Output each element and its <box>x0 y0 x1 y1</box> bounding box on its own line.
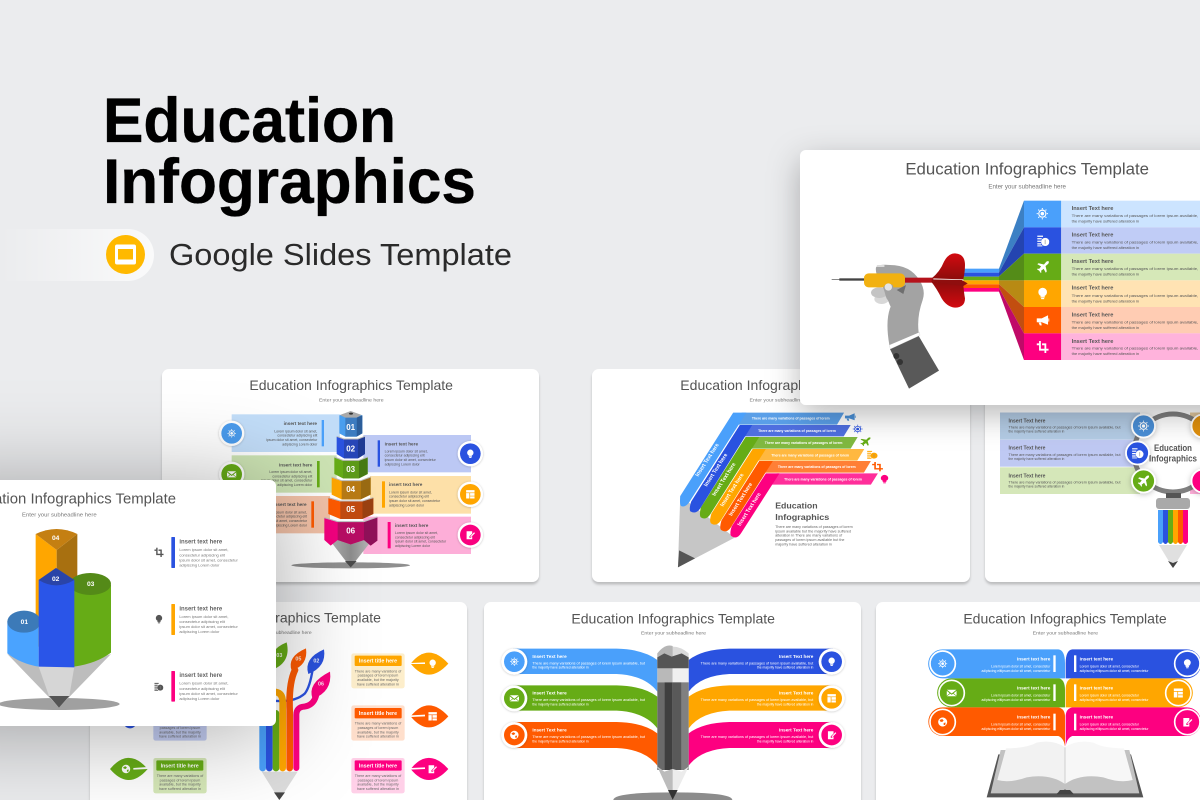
pencil tip <box>678 550 695 567</box>
item: blue (hidden under front slide): have suffered alteration in <box>159 735 201 739</box>
left ribbon text <box>982 655 1056 731</box>
pencil colored bands <box>680 413 779 537</box>
side paragraph: ipsum available but the majority have suffered <box>775 530 851 533</box>
pencil segment 04 <box>332 477 371 499</box>
right ribbon text: Lorem ipsum dolor sit amet, consectetur <box>1080 723 1140 727</box>
pencil handle <box>1156 493 1190 568</box>
left ribbon text: adipiscing elitipsum dolor sit amet, consectetur <box>982 727 1051 731</box>
right ribbon text: insert text here <box>1080 714 1113 719</box>
pencil shadow <box>613 792 732 800</box>
central pencil <box>657 645 689 800</box>
item: red-orange leaf: There are many variations of <box>355 722 402 726</box>
left bar text: consectetur adipiscing elit <box>277 434 317 438</box>
list item: crop: Lorem ipsum dolor sit amet, <box>179 547 229 552</box>
right bar text: ipsum dolor sit amet, consectetur <box>385 458 437 462</box>
ribbon text right: Insert Text here <box>779 654 814 659</box>
right bar text: adipiscing Lorem dolor <box>385 462 421 466</box>
ribbon text left: Insert Text here <box>532 727 567 732</box>
horizontal ribbons <box>734 413 878 485</box>
left ribbon text: insert text here <box>1017 714 1051 719</box>
text column: the majority have suffered alteration in <box>1072 298 1139 303</box>
list item: coins: adipiscing Lorem dolor <box>179 696 220 701</box>
list item: bulb: Lorem ipsum dolor sit amet, <box>179 614 229 619</box>
column 01: 01 <box>21 619 28 626</box>
item: green leaf: available, but the majority <box>159 783 201 787</box>
left ribbon text: adipiscing elitipsum dolor sit amet, consectetur <box>982 669 1051 673</box>
pencil segment 05: 05 <box>346 505 356 514</box>
ribbon end icons <box>845 413 888 483</box>
pencil segment 06 <box>324 517 377 546</box>
ribbon captions: There are many variations of passages of lorem <box>765 441 843 445</box>
pencil segment 06: 06 <box>346 526 356 535</box>
dart shaft <box>905 278 933 283</box>
left bar text: ipsum dolor sit amet, consectetur <box>261 479 313 483</box>
ribbon text left: Insert Text here <box>532 654 567 659</box>
left bar text: insert text here <box>284 421 317 426</box>
ribbon text left: the majority have suffered alteration in <box>532 666 589 670</box>
left ribbon text: insert text here <box>1017 685 1051 690</box>
ribbon text left <box>532 654 645 743</box>
dart flights <box>931 253 968 308</box>
item: red-orange leaf: Insert title here <box>359 711 397 717</box>
left bar text: Lorem ipsum dolor sit amet, <box>264 510 307 514</box>
list item: bulb: adipiscing Lorem dolor <box>179 629 220 634</box>
barrel <box>864 273 905 287</box>
text strips: There are many variations of passages of lorem ipsum available, but <box>1008 453 1121 457</box>
left ribbon text: Lorem ipsum dolor sit amet, consectetur <box>991 723 1051 727</box>
item: green leaf <box>110 758 207 793</box>
item: pink leaf: There are many variations of <box>355 774 402 778</box>
left ribbons <box>928 649 1065 747</box>
text strips: There are many variations of passages of lorem ipsum available, but <box>1008 481 1121 485</box>
item: green leaf: have suffered alteration in <box>159 787 201 791</box>
right bar text: insert text here <box>389 482 423 487</box>
pencil segment 03 <box>334 457 368 478</box>
left bar text: Lorem ipsum dolor sit amet, <box>269 470 312 474</box>
list item: coins: ipsum dolor sit amet, consectetur <box>179 691 238 696</box>
slide subheadline: Enter your subheadline here <box>319 397 384 402</box>
heading: Education Infographics: Infographics <box>103 147 476 217</box>
right bar text: adipiscing Lorem dolor <box>395 544 431 548</box>
text strips: Insert Text here <box>1008 473 1046 479</box>
panel: diagonal pencil slide <box>592 369 970 582</box>
text strips: Insert Text here <box>1008 418 1046 424</box>
right ribbon text: Lorem ipsum dolor sit amet, consectetur <box>1080 694 1140 698</box>
text column: There are many variations of passages of lorem ipsum available, <box>1072 266 1198 271</box>
right bar text: consectetur adipiscing elit <box>385 454 425 458</box>
open book <box>987 742 1143 797</box>
ribbon captions <box>752 417 862 481</box>
rainbow flight stem <box>963 269 999 292</box>
left bar text: adipiscing Lorem dolor <box>277 483 313 487</box>
text column: There are many variations of passages of lorem ipsum available, <box>1072 346 1198 351</box>
right ribbons <box>689 649 833 766</box>
magnifier center label <box>1149 443 1197 464</box>
magnifier center label: Education <box>1154 443 1192 453</box>
left ribbon text: adipiscing elitipsum dolor sit amet, consectetur <box>982 698 1051 702</box>
right bar text <box>378 440 447 548</box>
list item: crop: consectetur adipiscing elit <box>179 552 226 557</box>
left ribbon text: Lorem ipsum dolor sit amet, consectetur <box>991 694 1051 698</box>
right ribbons <box>1066 649 1200 747</box>
side paragraph: alteration in There are many variations of <box>775 534 842 538</box>
hand <box>871 265 924 345</box>
left ribbon text: insert text here <box>1017 656 1051 661</box>
right bar text: Lorem ipsum dolor sit amet, <box>389 490 432 494</box>
list item: bulb <box>156 604 238 635</box>
item: orange leaf: There are many variations of <box>355 669 402 673</box>
text column: the majority have suffered alteration in <box>1072 351 1139 356</box>
column 02: 02 <box>52 576 60 583</box>
panel: stacked pencil slide <box>162 369 539 582</box>
text column: the majority have suffered alteration in <box>1072 218 1139 223</box>
item: pink leaf: Insert title here <box>359 763 397 769</box>
text column: the majority have suffered alteration in <box>1072 271 1139 276</box>
left icon badges <box>501 649 527 748</box>
item: orange leaf: Insert title here <box>359 659 397 665</box>
panel: front 3D pencil chart slide <box>0 480 276 726</box>
side paragraph: There are many variations of passages of lorem <box>775 525 853 529</box>
needle <box>832 278 865 281</box>
list item: bulb: insert text here <box>179 606 223 612</box>
left ribbons <box>513 649 657 766</box>
icon badges <box>219 421 483 548</box>
left bar text: ipsum dolor sit amet, consectetur <box>266 438 318 442</box>
item: green leaf: There are many variations of <box>157 774 204 778</box>
item: blue (hidden under front slide) <box>123 713 207 741</box>
pencil segment 01 <box>339 411 362 437</box>
right icon badges <box>819 649 845 748</box>
left bar text: insert text here <box>273 502 307 507</box>
item: orange leaf <box>351 653 448 688</box>
ribbon text right: There are many variations of passages of lorem ipsum available, but <box>701 661 813 665</box>
list item: coins: Lorem ipsum dolor sit amet, <box>179 681 229 686</box>
left bar text: adipiscing Lorem dolor <box>282 442 318 446</box>
slide subheadline: Enter your subheadline here <box>988 184 1067 190</box>
text strips: the majority have suffered alteration in <box>1008 457 1065 461</box>
panel: pencil with side ribbons slide <box>484 602 861 800</box>
right bars <box>363 435 471 554</box>
list item: coins: consectetur adipiscing elit <box>179 686 226 691</box>
slide title: Education Infographics Template <box>571 610 775 626</box>
ribbon captions: There are many variations of passages of lorem <box>778 465 856 469</box>
heading: Education Infographics: Education <box>103 86 396 156</box>
list item: bulb: ipsum dolor sit amet, consectetur <box>179 624 238 629</box>
item: pink leaf <box>351 758 448 793</box>
panel: open book slide <box>876 602 1200 800</box>
left bars <box>232 414 340 533</box>
right bar text: consectetur adipiscing elit <box>389 495 429 499</box>
list item: crop <box>154 537 238 568</box>
text column: There are many variations of passages of lorem ipsum available, <box>1072 320 1198 325</box>
left ribbon text: Lorem ipsum dolor sit amet, consectetur <box>991 665 1051 669</box>
text column: There are many variations of passages of lorem ipsum available, <box>1072 240 1198 245</box>
pencil segment 04: 04 <box>346 485 356 494</box>
subtitle pill: Google Slides Template: Google Slides Template <box>169 237 512 272</box>
slide subheadline: Enter your subheadline here <box>641 630 706 635</box>
item: blue (hidden under front slide): passages of lorem ipsum <box>160 726 200 730</box>
band labels <box>694 443 763 527</box>
panel: tree pencil slide <box>90 602 467 800</box>
side heading <box>775 500 829 522</box>
column 03 <box>70 573 111 667</box>
list item: coins: insert text here <box>179 673 223 679</box>
right bar text: ipsum dolor sit amet, consectetur <box>395 540 447 544</box>
funnel <box>999 201 1024 360</box>
text strips: the majority have suffered alteration in <box>1008 485 1065 489</box>
band labels: Insert Text here <box>694 443 721 478</box>
band labels: Insert Text here <box>711 462 738 497</box>
ribbon captions: There are many variations of passages of lorem <box>758 429 836 433</box>
text column: Insert Text here <box>1072 312 1113 318</box>
right bar text: insert text here <box>385 441 418 446</box>
left bar text: insert text here <box>279 462 313 467</box>
item: orange leaf: passages of lorem ipsum <box>358 674 398 678</box>
left bar text: consectetur adipiscing elit <box>267 515 307 519</box>
text column: Insert Text here <box>1072 233 1113 239</box>
pencil segment 02: 02 <box>346 444 356 453</box>
tree leaves with numbers: 05 <box>295 656 301 662</box>
column 04 <box>36 529 77 647</box>
ribbon captions: There are many variations of passages of lorem <box>752 417 830 421</box>
ribbon text left: There are many variations of passages of lorem ipsum available, but <box>532 735 645 739</box>
side paragraph <box>775 525 853 547</box>
item: orange leaf: available, but the majority <box>357 678 399 682</box>
circular icons <box>930 651 1200 735</box>
right ribbon text: insert text here <box>1080 656 1113 661</box>
left bar text: ipsum dolor sit amet, consectetur <box>256 519 308 523</box>
slide title: Education Infographics Template <box>905 159 1149 178</box>
slide subheadline: Enter your subheadline here <box>249 630 312 636</box>
column 02 <box>39 568 74 667</box>
thumb <box>883 283 906 300</box>
slide subheadline: Enter your subheadline here <box>1033 630 1098 635</box>
item: red-orange leaf: available, but the majority <box>357 730 399 734</box>
item: red-orange leaf: passages of lorem ipsum <box>358 726 398 730</box>
icon glyphs <box>938 659 1192 726</box>
side paragraph: passages of lorem ipsum available but the <box>775 538 845 542</box>
ribbon text right: There are many variations of passages of lorem ipsum available, but <box>701 698 813 702</box>
slide title: Education Infographics Template <box>680 378 884 394</box>
heading: Education Infographics <box>103 86 476 217</box>
slide subheadline: Enter your subheadline here <box>750 398 815 403</box>
right bar text: ipsum dolor sit amet, consectetur <box>389 499 441 503</box>
ribbon text right: There are many variations of passages of lorem ipsum available, but <box>701 735 813 739</box>
ribbon text right: Insert Text here <box>779 691 814 696</box>
slide title: Education Infographics Template <box>963 610 1167 626</box>
item: green leaf: passages of lorem ipsum <box>160 778 200 782</box>
tree leaves with numbers: 03 <box>276 653 282 659</box>
sleeve <box>889 332 939 389</box>
pencil tree trunk and branches <box>262 669 316 800</box>
ribbon captions: There are many variations of passages of lorem <box>771 454 849 457</box>
pencil segment 01: 01 <box>346 423 356 432</box>
column 03: 03 <box>87 581 95 588</box>
pencil shadow <box>0 698 120 710</box>
right ribbon text: insert text here <box>1080 685 1113 690</box>
side paragraph: majority have suffered alteration in <box>775 543 832 547</box>
side heading: Education <box>775 500 818 511</box>
item: orange leaf: have suffered alteration in <box>357 682 399 686</box>
icon column <box>1024 201 1061 360</box>
right ribbon text: adipiscing elitipsum dolor sit amet, consectetur <box>1080 669 1149 673</box>
text strips: Insert Text here <box>1008 446 1046 452</box>
text column: There are many variations of passages of lorem ipsum available, <box>1072 213 1198 218</box>
right bar text: adipiscing Lorem dolor <box>389 503 425 507</box>
ribbon text right: the majority have suffered alteration in <box>757 666 813 670</box>
icon badges <box>1126 414 1200 492</box>
ribbon text left: the majority have suffered alteration in <box>532 702 589 706</box>
band labels: Insert Text here <box>719 473 746 508</box>
ribbon text left: There are many variations of passages of lorem ipsum available, but <box>532 698 645 702</box>
pencil shadow <box>291 562 410 568</box>
slide title: Education Infographics Template <box>178 610 381 626</box>
left bar text: Lorem ipsum dolor sit amet, <box>274 429 317 433</box>
pencil segment 03: 03 <box>346 465 356 474</box>
list item: crop: insert text here <box>179 539 223 545</box>
pencil tip <box>328 538 373 567</box>
left bar text <box>256 420 324 528</box>
pencil cone <box>7 654 111 708</box>
list item: bulb: consectetur adipiscing elit <box>179 619 226 624</box>
ribbon text left: There are many variations of passages of lorem ipsum available, but <box>532 661 645 665</box>
ribbon text left: the majority have suffered alteration in <box>532 739 589 743</box>
slide subheadline: Enter your subheadline here <box>22 513 97 519</box>
right ribbon text: adipiscing elitipsum dolor sit amet, consectetur <box>1080 727 1149 731</box>
list item: crop: adipiscing Lorem dolor <box>179 562 220 567</box>
right strips behind ring <box>1190 412 1200 494</box>
right ribbon text: adipiscing elitipsum dolor sit amet, consectetur <box>1080 698 1149 702</box>
text strips <box>1000 412 1140 494</box>
column 04: 04 <box>52 535 60 542</box>
ribbon text right: Insert Text here <box>779 727 814 732</box>
ribbon captions: There are many variations of passages of lorem <box>784 478 862 481</box>
tree leaves with numbers: 06 <box>318 681 324 687</box>
tree leaves with numbers: 02 <box>313 659 319 665</box>
subtitle pill: Google Slides Template <box>0 229 512 281</box>
slide title: Education Infographics Template <box>249 377 453 393</box>
text column: the majority have suffered alteration in <box>1072 245 1139 250</box>
panel: front dart slide <box>800 150 1200 405</box>
item: red-orange leaf <box>351 705 448 741</box>
panel: magnifier pencil slide <box>985 369 1200 582</box>
tree leaves with numbers <box>270 642 330 699</box>
text strips: There are many variations of passages of lorem ipsum available, but <box>1008 426 1121 430</box>
pencil body <box>678 496 735 567</box>
band labels: Insert Text here <box>728 482 754 517</box>
item: pink leaf: passages of lorem ipsum <box>358 778 398 782</box>
item: pink leaf: available, but the majority <box>357 783 399 787</box>
right ribbon text: Lorem ipsum dolor sit amet, consectetur <box>1080 665 1140 669</box>
text column: There are many variations of passages of lorem ipsum available, <box>1072 293 1198 298</box>
right bar text: Lorem ipsum dolor sit amet, <box>395 531 438 535</box>
text column: Insert Text here <box>1072 259 1113 265</box>
text column: Insert Text here <box>1072 286 1113 292</box>
text column: Insert Text here <box>1072 339 1113 345</box>
text column: Insert Text here <box>1072 206 1113 212</box>
list item: coins <box>154 671 238 702</box>
right ribbon text <box>1074 655 1149 731</box>
ribbon text right <box>701 654 814 743</box>
ribbon text right: the majority have suffered alteration in <box>757 739 813 743</box>
list item: crop: ipsum dolor sit amet, consectetur <box>179 557 238 562</box>
side heading: Infographics <box>775 512 829 522</box>
item: blue (hidden under front slide): available, but the majority <box>159 730 201 734</box>
left bar text: consectetur adipiscing elit <box>272 474 312 478</box>
ribbon text left: Insert Text here <box>532 691 567 696</box>
band labels: Insert Text here <box>737 492 763 527</box>
right bar text: insert text here <box>395 523 429 528</box>
right bar text: Lorem ipsum dolor sit amet, <box>385 449 428 453</box>
pencil segment 02 <box>337 436 365 458</box>
pencil segment 05 <box>328 498 373 519</box>
column 01 <box>7 611 41 667</box>
ribbon text right: the majority have suffered alteration in <box>757 702 813 706</box>
text column <box>1062 201 1200 360</box>
left bar text: adipiscing Lorem dolor <box>272 523 308 527</box>
band labels: Insert Text here <box>703 453 730 488</box>
text strips: the majority have suffered alteration in <box>1008 430 1065 434</box>
magnifier ring <box>1134 414 1200 492</box>
item: green leaf: Insert title here <box>161 763 199 769</box>
right bar text: consectetur adipiscing elit <box>395 535 435 539</box>
text column: the majority have suffered alteration in <box>1072 325 1139 330</box>
item: red-orange leaf: have suffered alteration in <box>357 735 399 739</box>
item: pink leaf: have suffered alteration in <box>357 787 399 791</box>
